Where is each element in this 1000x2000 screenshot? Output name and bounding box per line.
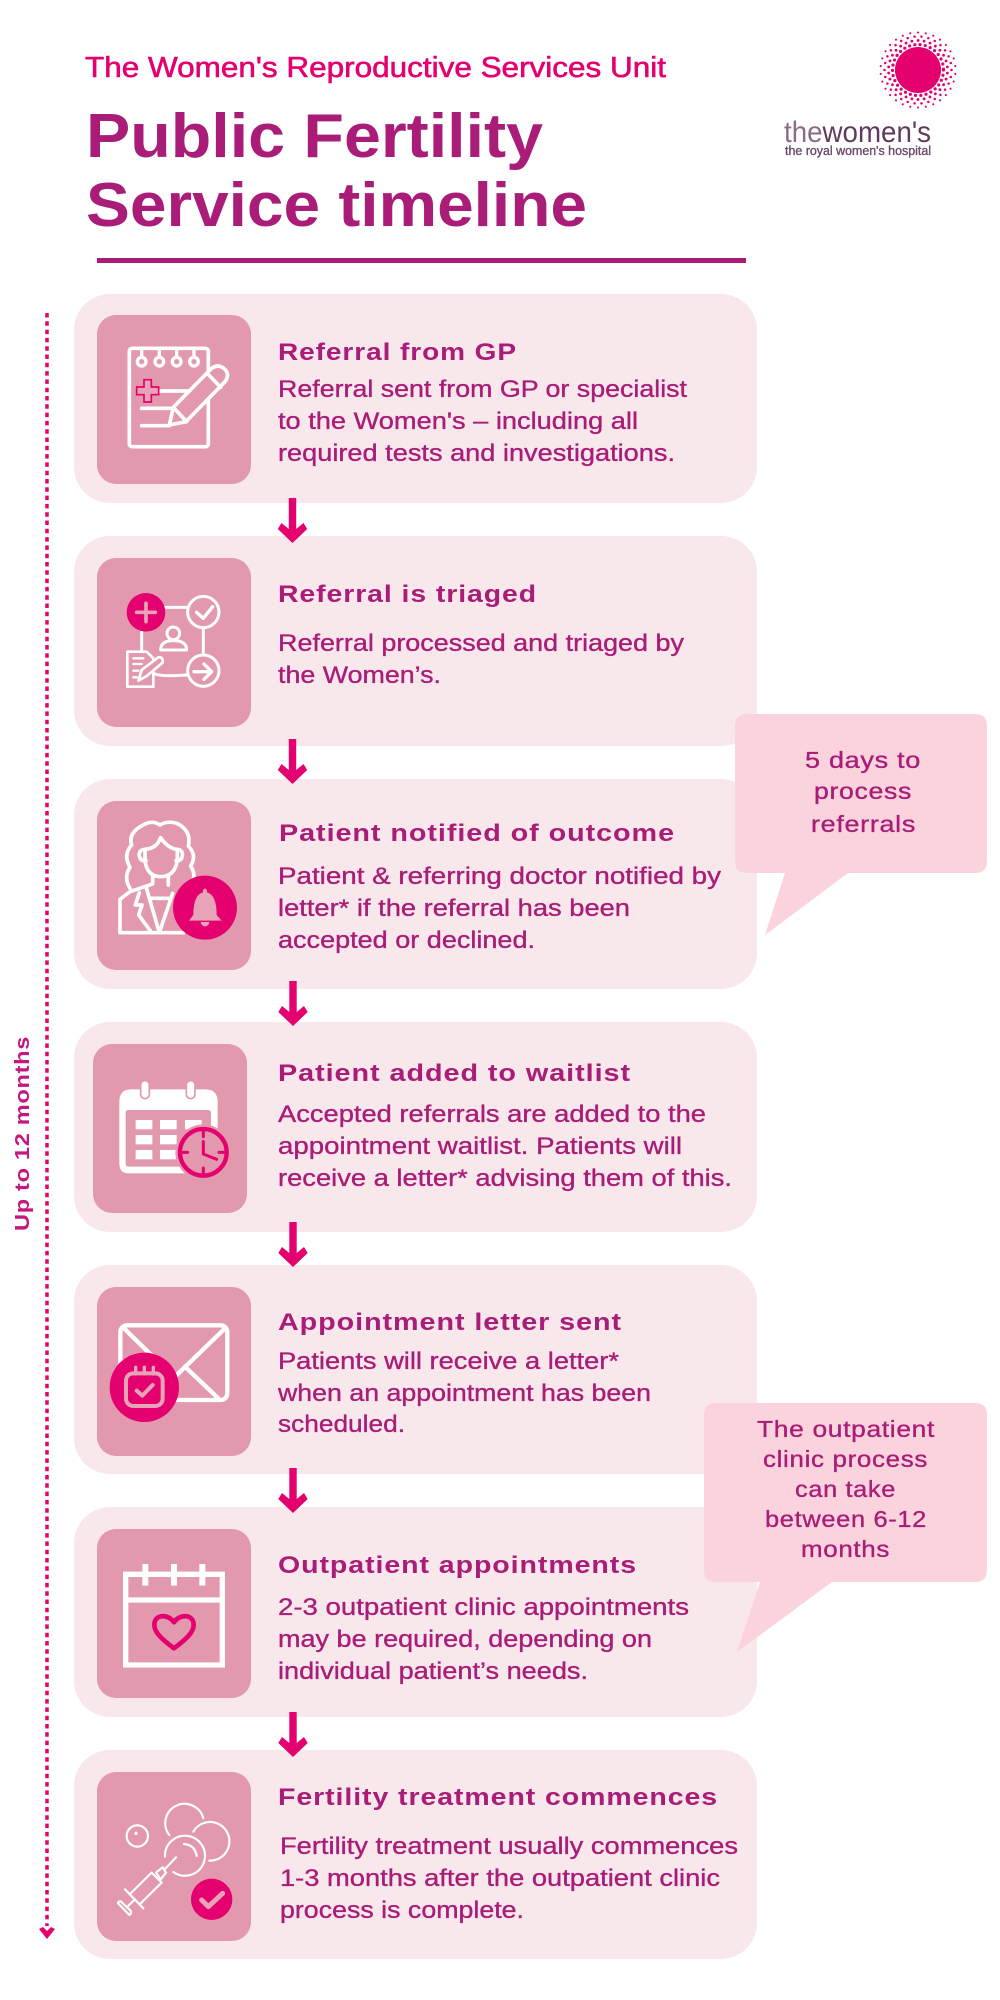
description: when an appointment has been (277, 1380, 651, 1407)
description: may be required, depending on (278, 1626, 652, 1653)
description (278, 376, 687, 467)
panel: patient notified of outcome (74, 779, 757, 989)
callout: 5 days to process referrals (735, 714, 987, 935)
timeline duration label: Up to 12 months (11, 1036, 34, 1231)
description (278, 1594, 689, 1685)
arrow 3 (278, 981, 308, 1026)
arrow 6 (278, 1712, 308, 1757)
description: required tests and investigations. (278, 440, 675, 467)
heading: Appointment letter sent (278, 1309, 622, 1336)
description: Referral sent from GP or specialist (278, 376, 687, 403)
icon: woman with bell (97, 801, 251, 970)
panel: appointment letter sent (74, 1265, 757, 1474)
heading: Patient notified of outcome (279, 820, 675, 847)
title: Public Fertility (86, 102, 544, 171)
arrow 4 (278, 1222, 308, 1267)
icon: envelope with calendar check (97, 1287, 251, 1456)
callout: outpatient clinic process duration: clinic process (763, 1446, 928, 1472)
description: letter* if the referral has been (278, 895, 630, 922)
icon: notepad with pen (97, 315, 251, 484)
panel: referral from GP (74, 294, 757, 503)
callout: 5 days to process referrals: referrals (811, 811, 916, 837)
description: to the Women's – including all (278, 408, 638, 435)
callout: outpatient clinic process duration (704, 1403, 987, 1652)
description (277, 1348, 651, 1438)
icon: triage flow (97, 558, 251, 727)
description: 1-3 months after the outpatient clinic (280, 1865, 720, 1892)
logo: the women's: thewomen's (784, 116, 931, 149)
callout: 5 days to process referrals: 5 days to (805, 747, 921, 773)
description: process is complete. (280, 1897, 524, 1924)
description (278, 1101, 732, 1192)
description: 2-3 outpatient clinic appointments (278, 1594, 689, 1621)
subtitle: The Women's Reproductive Services Unit (85, 52, 666, 84)
description: Fertility treatment usually commences (280, 1833, 738, 1860)
description: appointment waitlist. Patients will (278, 1133, 682, 1160)
arrow 2 (278, 739, 307, 784)
logo: the women's (784, 29, 959, 158)
title underline (97, 258, 746, 263)
description: Patient & referring doctor notified by (278, 863, 721, 890)
icon: syringe and eggs (97, 1772, 251, 1941)
arrow 1 (278, 498, 307, 543)
timeline dotted arrow (39, 313, 55, 1939)
panel: referral is triaged (74, 536, 757, 746)
heading: Referral is triaged (278, 581, 537, 608)
heading: Outpatient appointments (278, 1552, 637, 1579)
description: Accepted referrals are added to the (278, 1101, 706, 1128)
icon: calendar with heart (97, 1529, 251, 1698)
logo: the women's: the royal women's hospital (785, 143, 931, 158)
description: Patients will receive a letter* (278, 1348, 619, 1375)
callout: 5 days to process referrals: process (814, 778, 912, 804)
icon: calendar with clock (93, 1044, 247, 1213)
description (278, 863, 721, 954)
description (280, 1833, 738, 1924)
description: accepted or declined. (278, 927, 535, 954)
description: Referral processed and triaged by (278, 630, 684, 657)
description: scheduled. (278, 1411, 405, 1438)
title (86, 102, 587, 240)
heading: Fertility treatment commences (278, 1784, 718, 1811)
panel: patient added to waitlist (74, 1022, 757, 1232)
callout: outpatient clinic process duration: months (801, 1536, 890, 1562)
arrow 5 (278, 1468, 308, 1513)
description: the Women’s. (278, 662, 441, 689)
callout: outpatient clinic process duration: The outpatient (757, 1416, 935, 1442)
heading: Referral from GP (278, 339, 517, 366)
description (278, 630, 684, 689)
heading: Patient added to waitlist (278, 1060, 631, 1087)
callout: outpatient clinic process duration: between 6-12 (765, 1506, 927, 1532)
title: Service timeline (86, 171, 587, 240)
panel: fertility treatment commences (74, 1750, 757, 1959)
callout: outpatient clinic process duration: can take (795, 1476, 896, 1502)
description: individual patient’s needs. (278, 1658, 588, 1685)
description: receive a letter* advising them of this. (278, 1165, 732, 1192)
panel: outpatient appointments (74, 1507, 757, 1717)
